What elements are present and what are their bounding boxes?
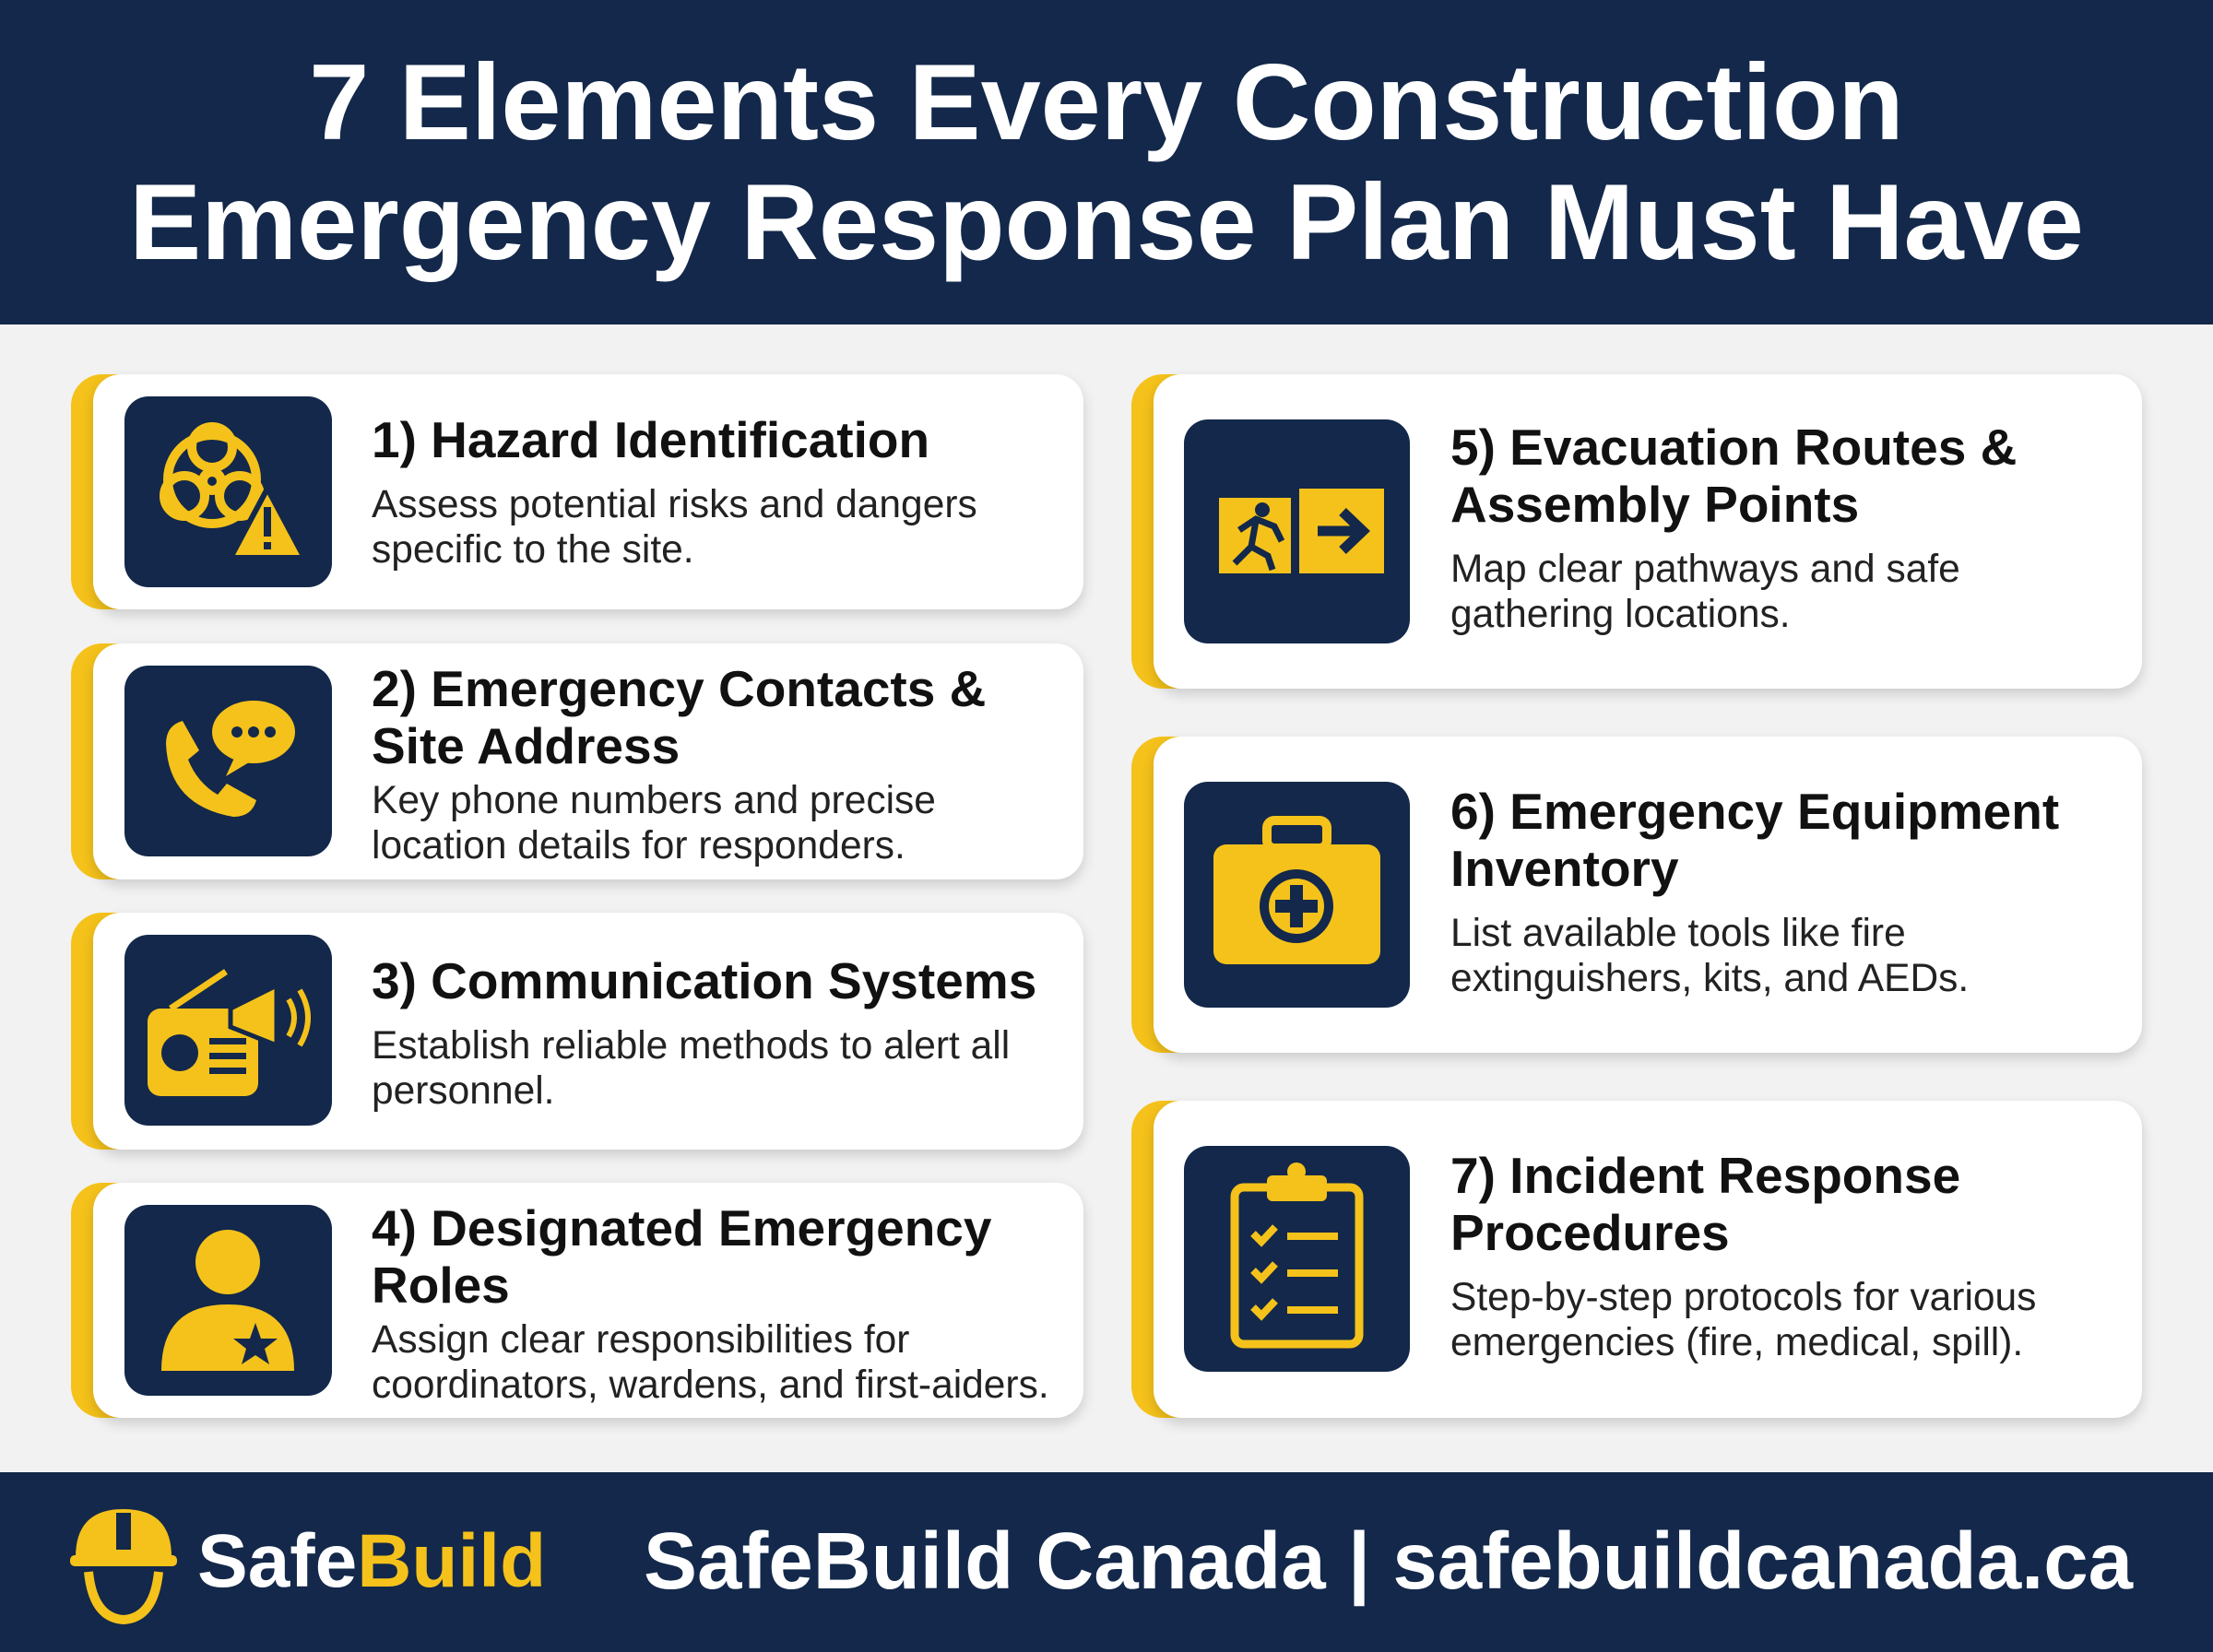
card 5: evacuation routes bbox=[1131, 374, 2142, 689]
title bbox=[129, 41, 2084, 282]
text: emergency contacts bbox=[372, 660, 986, 867]
icon: exit sign bbox=[1184, 419, 1410, 643]
card 4: designated roles bbox=[71, 1183, 1083, 1418]
text: evacuation routes: gathering locations. bbox=[1450, 593, 1791, 636]
text: communication systems: Establish reliable methods to alert all bbox=[372, 1024, 1010, 1068]
text: emergency equipment: 6) Emergency Equipment bbox=[1450, 783, 2059, 840]
card 6: emergency equipment bbox=[1131, 737, 2142, 1053]
text: emergency contacts: location details for responders. bbox=[372, 824, 905, 867]
card 2: emergency contacts bbox=[71, 643, 1083, 879]
footer text: website: SafeBuild Canada | safebuildcanada.ca bbox=[644, 1516, 2133, 1606]
footer bbox=[0, 1472, 2213, 1652]
text: emergency equipment: extinguishers, kits, and AEDs. bbox=[1450, 957, 1969, 1000]
text: emergency contacts: 2) Emergency Contacts & bbox=[372, 660, 986, 717]
text: hazard identification: specific to the site. bbox=[372, 528, 694, 572]
card 3: communication systems bbox=[71, 913, 1083, 1150]
text: hazard identification: 1) Hazard Identification bbox=[372, 411, 929, 468]
text: hazard identification bbox=[372, 411, 977, 572]
icon: clipboard checklist bbox=[1184, 1146, 1410, 1372]
text: incident response: Procedures bbox=[1450, 1204, 1730, 1261]
card 1: hazard identification bbox=[71, 374, 1083, 609]
text: incident response bbox=[1450, 1147, 2036, 1364]
text: incident response: emergencies (fire, medical, spill). bbox=[1450, 1321, 2023, 1364]
text: designated roles bbox=[372, 1199, 1049, 1407]
text: incident response: 7) Incident Response bbox=[1450, 1147, 1960, 1204]
text: evacuation routes: Map clear pathways and safe bbox=[1450, 548, 1960, 591]
text: incident response: Step-by-step protocols for various bbox=[1450, 1276, 2036, 1319]
text: emergency equipment: List available tools like fire bbox=[1450, 912, 1906, 955]
title: Emergency Response Plan Must Have bbox=[129, 161, 2084, 282]
text: designated roles: Assign clear responsibilities for bbox=[372, 1318, 909, 1362]
icon: biohazard and warning bbox=[124, 396, 332, 587]
text: emergency equipment: Inventory bbox=[1450, 840, 1679, 897]
text: evacuation routes: Assembly Points bbox=[1450, 476, 1859, 533]
text: communication systems: personnel. bbox=[372, 1069, 554, 1113]
text: designated roles: 4) Designated Emergency bbox=[372, 1199, 991, 1257]
icon: hard hat logo bbox=[70, 1509, 177, 1624]
logo text: SafeBuild bbox=[197, 1519, 546, 1603]
text: communication systems bbox=[372, 952, 1036, 1113]
text: communication systems: 3) Communication Systems bbox=[372, 952, 1036, 1009]
icon: radio and megaphone bbox=[124, 935, 332, 1126]
text: emergency equipment bbox=[1450, 783, 2059, 1000]
text: hazard identification: Assess potential risks and dangers bbox=[372, 483, 977, 526]
text: designated roles: Roles bbox=[372, 1257, 510, 1314]
text: evacuation routes bbox=[1450, 419, 2017, 636]
text: designated roles: coordinators, wardens, and first-aiders. bbox=[372, 1363, 1049, 1407]
text: emergency contacts: Key phone numbers and precise bbox=[372, 779, 936, 822]
card 7: incident response bbox=[1131, 1101, 2142, 1418]
header bbox=[0, 0, 2213, 324]
text: evacuation routes: 5) Evacuation Routes & bbox=[1450, 419, 2017, 476]
text: emergency contacts: Site Address bbox=[372, 717, 680, 774]
icon: person with star bbox=[124, 1205, 332, 1396]
icon: phone with chat bubble bbox=[124, 666, 332, 856]
icon: first aid kit bbox=[1184, 782, 1410, 1008]
title: 7 Elements Every Construction bbox=[309, 41, 1904, 162]
